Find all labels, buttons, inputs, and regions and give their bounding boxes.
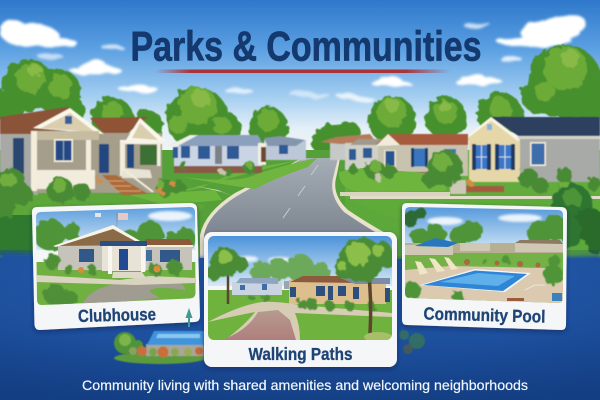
pool picture: [405, 207, 563, 303]
front gable: [33, 108, 104, 134]
pool label: Community Pool: [423, 303, 546, 327]
columns: [31, 131, 160, 191]
card: Community Pool: [402, 203, 568, 330]
clouds: [1, 14, 587, 100]
clubhouse label: Clubhouse: [78, 304, 156, 326]
blue lower band: [0, 250, 600, 400]
card: Clubhouse: [30, 200, 200, 330]
walking paths label: Walking Paths: [248, 344, 353, 364]
steps: [466, 186, 504, 192]
second gable: [126, 118, 166, 141]
background trees: [0, 45, 600, 160]
right front house: [450, 117, 600, 194]
ground lawn: [0, 150, 600, 262]
title: Parks & Communities: [130, 22, 482, 70]
scene: sky background: [0, 0, 600, 160]
shrubs and flower beds: [0, 150, 600, 218]
middle right houses: [320, 134, 468, 177]
faded shrubs under pool card: [399, 330, 425, 354]
lawn strips: [130, 158, 600, 222]
steps: [102, 175, 150, 195]
walking paths picture: [206, 236, 394, 342]
tagline: Community living with shared amenities and welcoming neighborhoods: [82, 377, 528, 393]
railing: [35, 170, 95, 189]
clubhouse picture: [36, 207, 196, 305]
shutters and windows: [472, 144, 476, 170]
left front house: [0, 107, 166, 195]
middle left houses: [168, 135, 306, 173]
curving road: [195, 158, 450, 262]
window, door, side window: [54, 139, 73, 162]
icon: small tree marker: [186, 308, 192, 327]
right foreground tree: [548, 184, 600, 254]
card: Walking Paths: [204, 232, 397, 367]
title underline: [155, 70, 450, 73]
small pool island vignette: [114, 331, 206, 364]
